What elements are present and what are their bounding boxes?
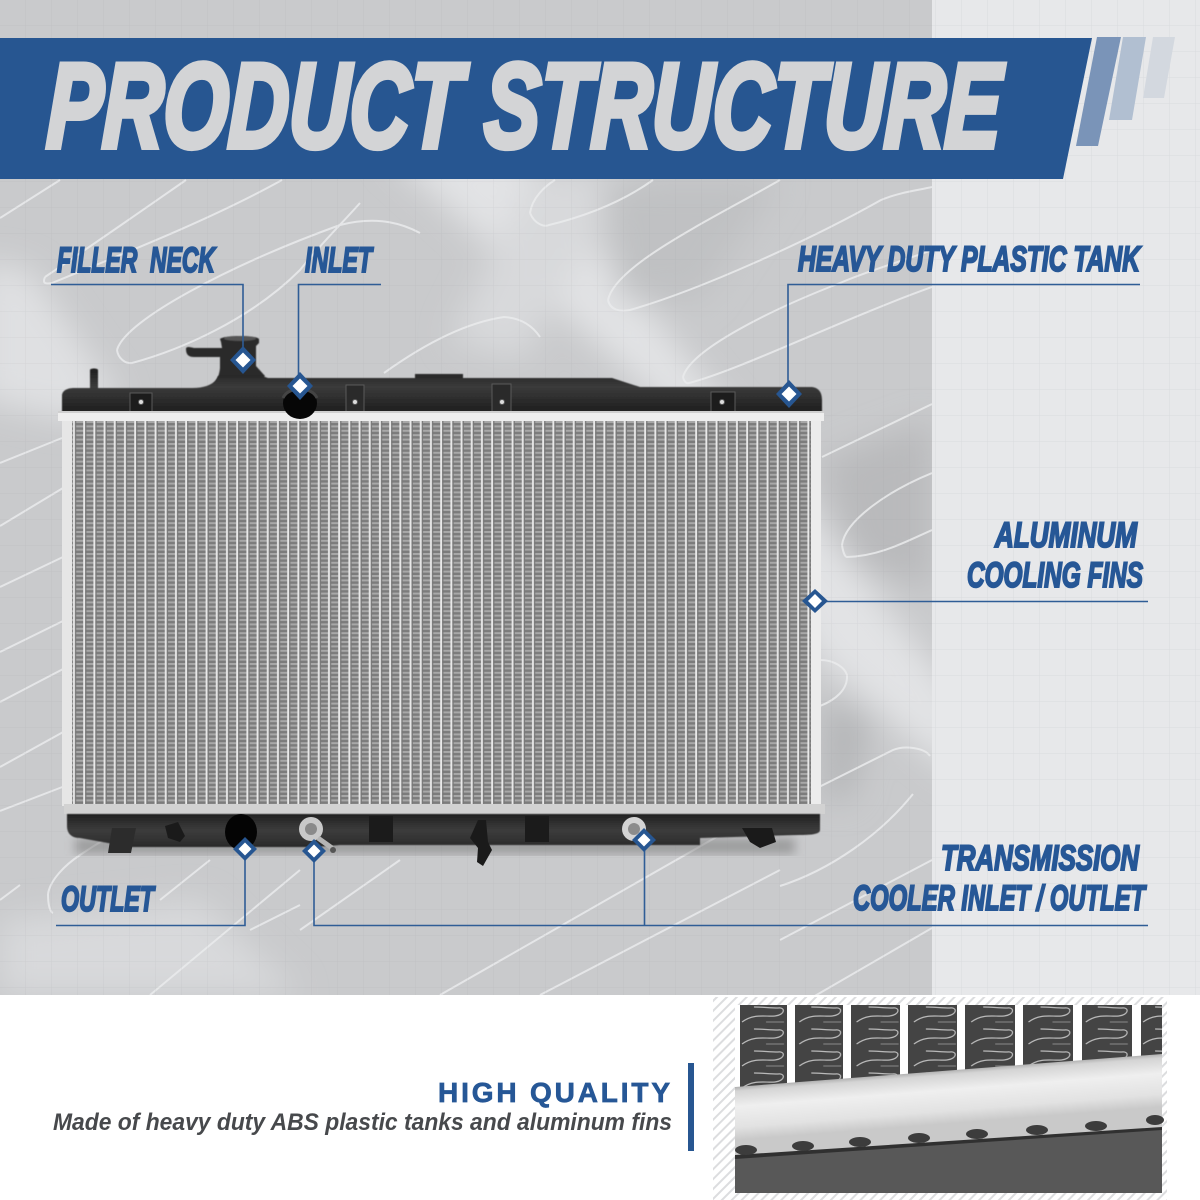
high quality heading: HIGH QUALITY [438,1077,670,1108]
soft shadow under tank [75,838,795,854]
callout: transmission cooler inlet / outlet [302,828,1148,926]
outlet pipe [225,814,257,850]
callout: aluminum cooling fins [802,516,1148,613]
top header rail [58,411,824,421]
callout: outlet: OUTLET [61,880,156,919]
side channels [62,418,821,806]
detail photo: fins and tank seam [713,997,1167,1200]
filler neck [186,336,265,392]
lower tank brackets [108,816,776,866]
accent bar [688,1063,694,1151]
callout: heavy duty plastic tank [776,240,1142,408]
callout: aluminum cooling fins: ALUMINUM [994,516,1138,555]
tank clips [130,384,735,412]
cooling fin core [72,421,811,804]
upper plastic tank [62,368,822,414]
quality description: Made of heavy duty ABS plastic tanks and aluminum fins [53,1109,672,1136]
radiator [58,336,825,866]
callout: filler neck [51,241,256,374]
transmission cooler fittings [299,817,646,853]
callout: inlet [287,241,381,400]
callout: inlet: INLET [305,241,374,280]
callout: outlet [56,837,257,926]
title banner [0,38,1092,179]
bottom header rail [64,804,825,814]
lower plastic tank [67,814,820,847]
inlet pipe [283,387,317,419]
callout: filler neck: FILLER NECK [57,241,217,280]
banner accent stripes [1076,37,1175,146]
